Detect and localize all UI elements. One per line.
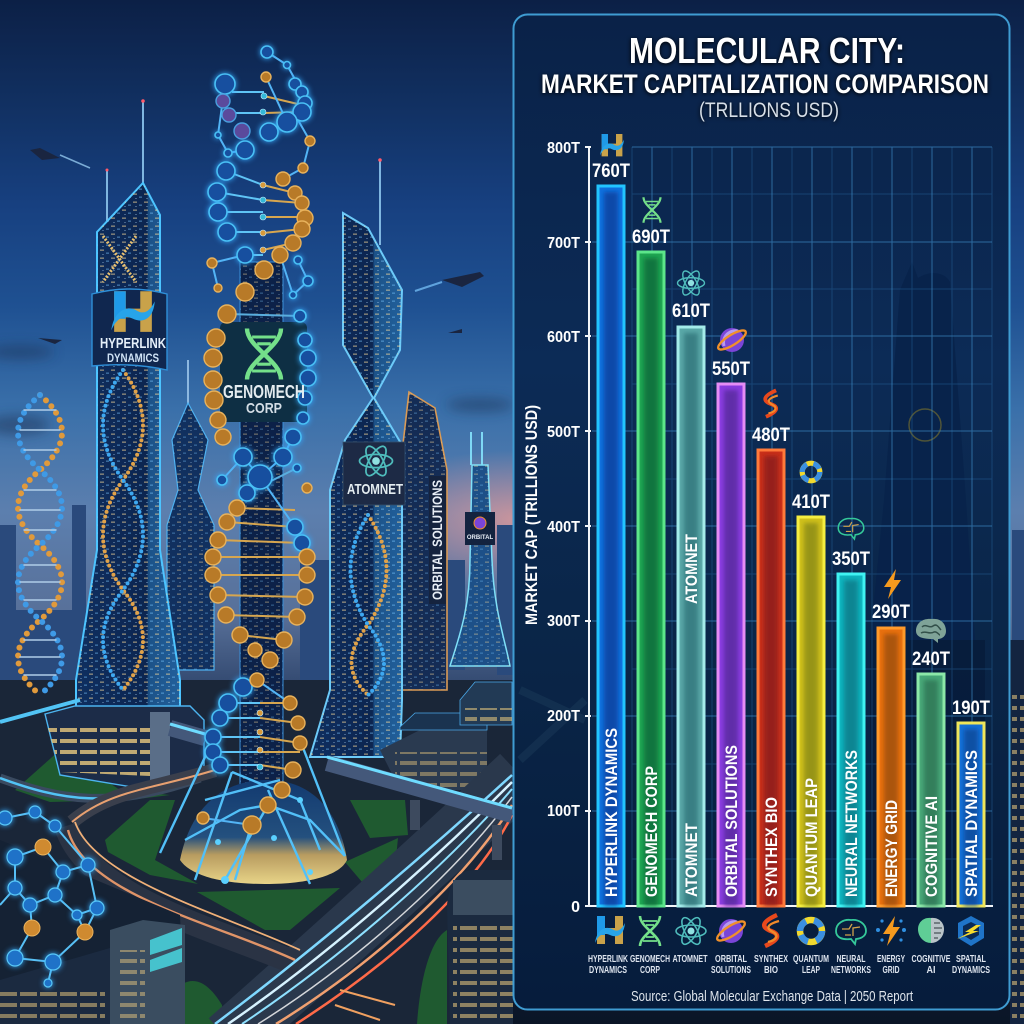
bottom company labels: ORBITAL <box>715 954 747 965</box>
tower: Hyperlink Dynamics <box>76 99 180 712</box>
bar: Hyperlink Dynamics 760T <box>592 134 630 906</box>
bottom company labels: NETWORKS <box>831 965 871 976</box>
bar: Cognitive AI 240T: COGNITIVE AI <box>922 796 941 897</box>
y axis ticks: 500T <box>547 424 580 441</box>
bottom company labels: DYNAMICS <box>952 965 990 976</box>
clouds <box>0 345 514 435</box>
y axis ticks: 100T <box>547 803 580 820</box>
bar: Genomech Corp 690T: GENOMECH CORP <box>642 766 661 897</box>
bar: Synthex Bio 480T <box>752 390 790 906</box>
central tower <box>240 262 283 790</box>
gardens <box>15 750 447 1024</box>
helix rungs <box>213 92 308 770</box>
bar: Quantum Leap 410T <box>792 463 830 906</box>
y axis ticks <box>547 140 580 916</box>
orbital vertical sign: ORBITAL SOLUTIONS <box>429 480 445 600</box>
bottom company labels: SOLUTIONS <box>711 965 751 976</box>
bottom company labels: SPATIAL <box>956 954 986 965</box>
y axis ticks: 700T <box>547 235 580 252</box>
bar: Hyperlink Dynamics 760T: HYPERLINK DYNAMICS <box>602 728 621 897</box>
tower helix <box>103 370 143 690</box>
bar: Neural Networks 350T: NEURAL NETWORKS <box>842 750 861 897</box>
rung midpoints <box>257 93 267 770</box>
tower helix <box>350 515 386 695</box>
bar: Atomnet 610T: ATOMNET <box>682 533 701 604</box>
chart panel <box>514 14 1010 1010</box>
bar: Cognitive AI 240T <box>912 619 950 906</box>
bottom icons row <box>595 915 984 947</box>
bar: Synthex Bio 480T: 480T <box>752 425 790 446</box>
office building bottom-left <box>0 840 185 1024</box>
banner: Hyperlink Dynamics <box>92 289 167 370</box>
roads with light trails <box>0 700 520 1024</box>
bottom company labels <box>588 954 990 976</box>
banner: Hyperlink Dynamics: HYPERLINK <box>100 335 166 352</box>
bar: Atomnet 610T: 610T <box>672 301 710 322</box>
bar: Atomnet 610T: ATOMNET <box>682 822 701 897</box>
tower: small mid-left <box>167 360 214 670</box>
bar: Neural Networks 350T: 350T <box>832 549 870 570</box>
central DNA double helix <box>197 46 316 834</box>
y axis ticks: 800T <box>547 140 580 157</box>
bar: Spatial Dynamics 190T: SPATIAL DYNAMICS <box>962 750 981 897</box>
city ground <box>0 680 513 1024</box>
tower: Orbital Solutions <box>400 392 447 690</box>
source line: Source: Global Molecular Exchange Data | 2050 Report <box>631 988 914 1005</box>
bottom company labels: AI <box>926 965 936 976</box>
bottom company labels: CORP <box>640 965 660 976</box>
helix base pavilion <box>160 740 347 884</box>
title: (TRLLIONS USD) <box>699 99 839 122</box>
bottom company labels: HYPERLINK <box>588 954 629 965</box>
bar: Orbital Solutions 550T <box>712 327 750 906</box>
bar: Spatial Dynamics 190T <box>952 698 990 906</box>
orbital sign <box>465 512 495 545</box>
blue beads <box>205 46 316 773</box>
dim tower behind chart <box>520 262 985 906</box>
bottom company labels: GRID <box>882 965 900 976</box>
bottom company labels: GENOMECH <box>630 954 670 965</box>
bottom company labels: ATOMNET <box>672 954 708 965</box>
bar: Orbital Solutions 550T: 550T <box>712 359 750 380</box>
bar: Orbital Solutions 550T: ORBITAL SOLUTIONS <box>722 745 741 897</box>
bottom company labels: DYNAMICS <box>589 965 627 976</box>
bar: Quantum Leap 410T: QUANTUM LEAP <box>802 778 821 897</box>
y axis ticks: 400T <box>547 519 580 536</box>
y axis ticks: 0 <box>571 899 580 916</box>
title: MOLECULAR CITY: <box>629 30 905 71</box>
y axis ticks: 600T <box>547 329 580 346</box>
banner: Genomech text: CORP <box>246 400 282 417</box>
flying vehicles <box>30 148 484 344</box>
elevated highway <box>170 724 512 860</box>
violet beads <box>216 94 250 139</box>
title <box>541 30 989 122</box>
banner: Hyperlink Dynamics: DYNAMICS <box>107 351 159 365</box>
bar: Genomech Corp 690T <box>632 197 670 906</box>
distant skyline <box>0 505 1024 700</box>
gold beads <box>197 72 315 834</box>
axes <box>585 147 993 906</box>
back buildings <box>380 682 512 790</box>
y axis label: MARKET CAP (TRILLIONS USD) <box>522 405 541 625</box>
bottom company labels: QUANTUM <box>793 954 829 965</box>
banner: Atomnet <box>343 442 405 505</box>
orbital sign: ORBITAL <box>467 535 493 541</box>
bar: Spatial Dynamics 190T: 190T <box>952 698 990 719</box>
tower: Atomnet <box>310 158 402 757</box>
y axis ticks: 300T <box>547 613 580 630</box>
bottom company labels: BIO <box>764 965 778 976</box>
bar: Energy Grid 290T <box>872 569 910 906</box>
bar: Quantum Leap 410T: 410T <box>792 492 830 513</box>
strand links <box>203 52 310 825</box>
bottom company labels: COGNITIVE <box>912 954 951 965</box>
banner: Atomnet: ATOMNET <box>347 481 403 498</box>
horizon glow <box>350 450 690 590</box>
molecule lattice bottom-left <box>0 806 104 987</box>
bar: Cognitive AI 240T: 240T <box>912 649 950 670</box>
bottom company labels: LEAP <box>802 965 820 976</box>
podium building <box>45 706 204 790</box>
bottom center building <box>447 870 513 1024</box>
banner: Genomech text: GENOMECH <box>223 382 305 402</box>
tower: far right spiral base <box>450 432 510 666</box>
bar: Neural Networks 350T <box>832 519 870 906</box>
y axis ticks: 200T <box>547 708 580 725</box>
grid <box>592 147 992 906</box>
bottom company labels: ENERGY <box>877 954 905 965</box>
left background DNA helix <box>18 395 62 695</box>
bar: Energy Grid 290T: ENERGY GRID <box>882 800 901 897</box>
bar: Genomech Corp 690T: 690T <box>632 227 670 248</box>
bar: Energy Grid 290T: 290T <box>872 602 910 623</box>
bottom company labels: NEURAL <box>836 954 866 965</box>
banner: Genomech text <box>223 328 305 417</box>
right edge city strip <box>1010 640 1024 1024</box>
bar: Hyperlink Dynamics 760T: 760T <box>592 161 630 182</box>
bar: Atomnet 610T <box>672 269 710 906</box>
bar: Synthex Bio 480T: SYNTHEX BIO <box>762 797 781 897</box>
bottom company labels: SYNTHEX <box>754 954 788 965</box>
banner: Genomech panel background <box>220 322 307 422</box>
